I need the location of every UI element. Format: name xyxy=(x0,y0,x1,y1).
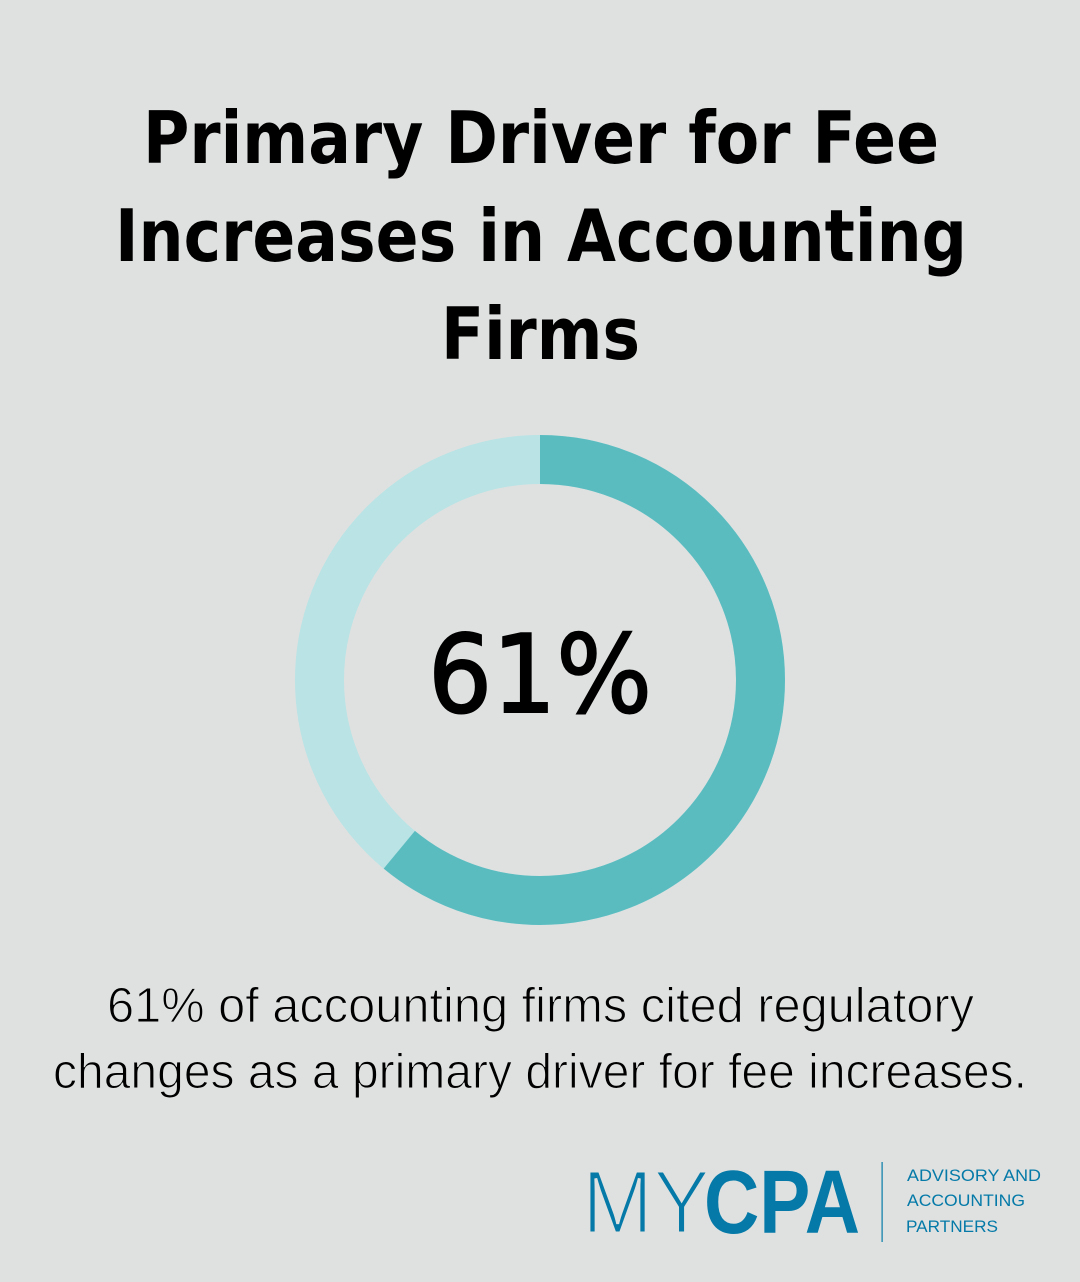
logo wordmark: MY xyxy=(582,1153,710,1253)
logo tagline xyxy=(906,1166,1041,1236)
title: Primary Driver for Fee xyxy=(143,96,939,180)
caption xyxy=(53,979,1027,1099)
title: Firms xyxy=(441,292,640,376)
logo wordmark: CPA xyxy=(704,1153,860,1253)
logo tagline: ADVISORY AND xyxy=(907,1166,1041,1185)
logo wordmark xyxy=(582,1153,860,1253)
title: Increases in Accounting xyxy=(115,194,967,278)
title xyxy=(115,96,967,376)
caption: 61% of accounting firms cited regulatory xyxy=(107,979,974,1033)
logo divider xyxy=(882,1162,883,1242)
logo tagline: ACCOUNTING xyxy=(907,1191,1025,1210)
donut value: 61% xyxy=(428,613,652,738)
logo: MYCPA advisory and accounting partners xyxy=(582,1153,1041,1253)
caption: changes as a primary driver for fee increases. xyxy=(53,1045,1027,1099)
logo tagline: PARTNERS xyxy=(906,1217,998,1236)
donut chart: 61% xyxy=(320,460,760,900)
